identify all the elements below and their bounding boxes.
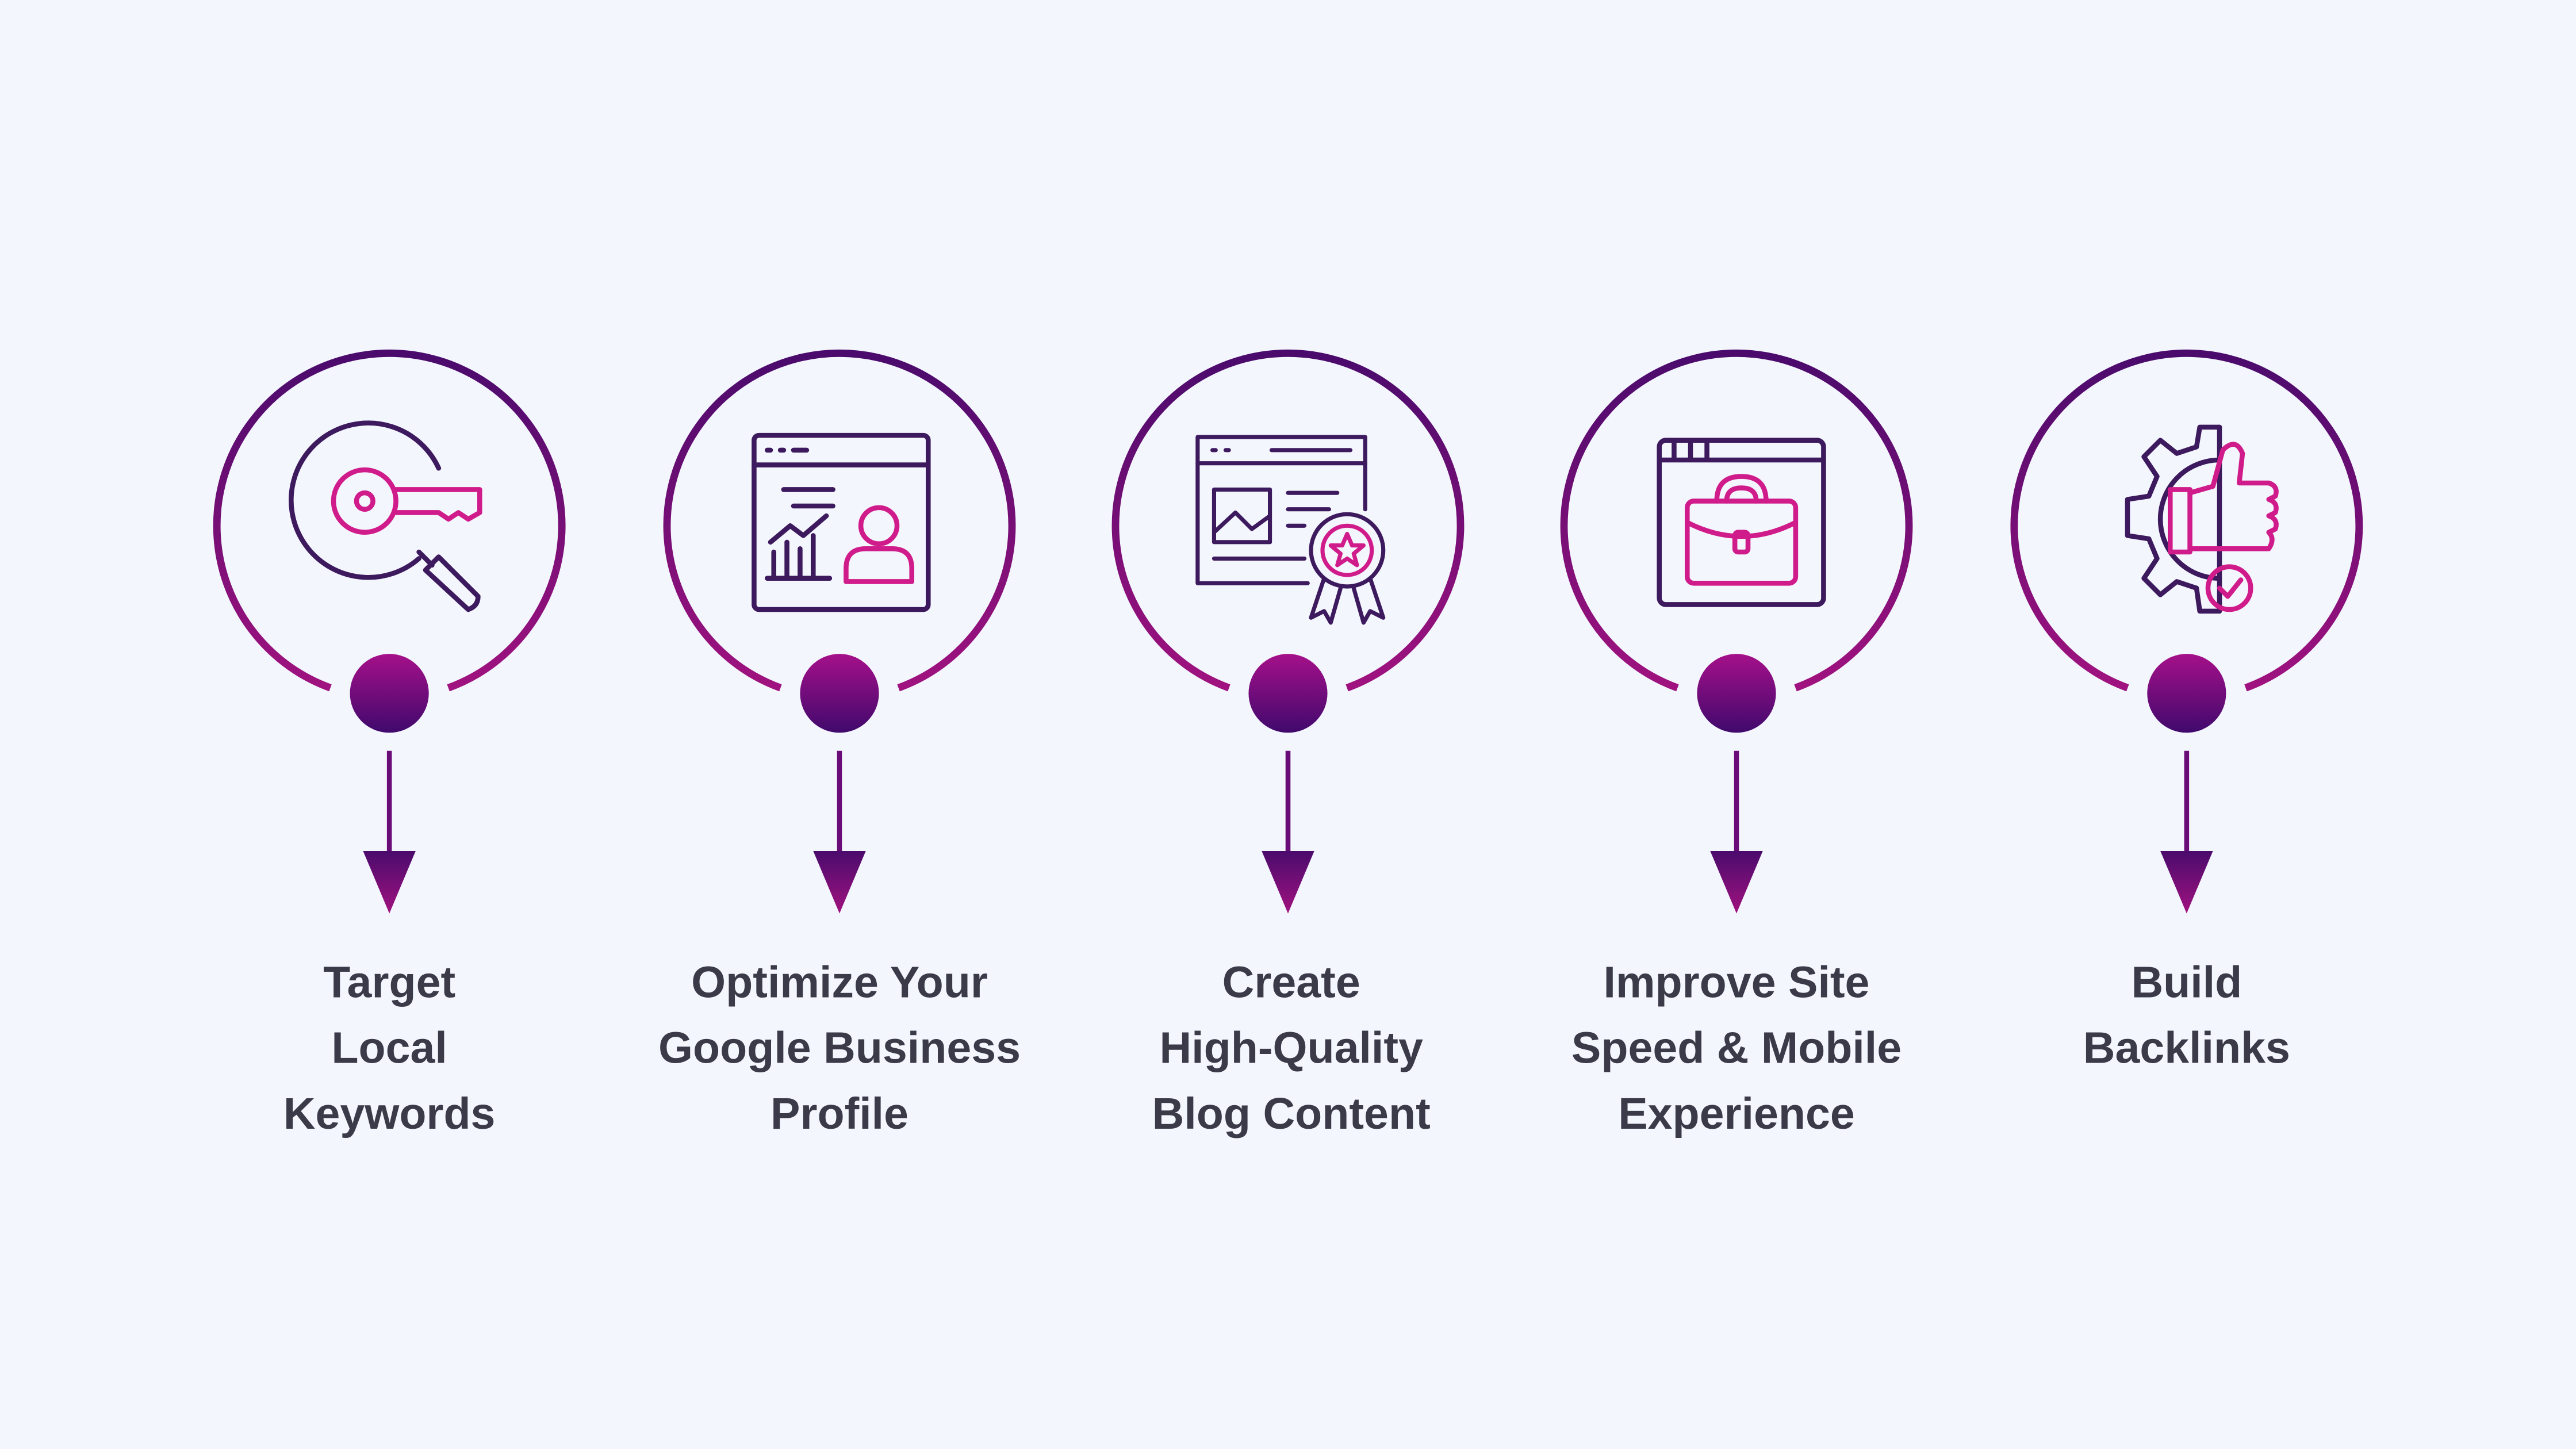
text: Speed & Mobile	[1571, 1023, 1902, 1073]
arrow	[363, 751, 416, 914]
step 5: Build Backlinks	[2014, 353, 2359, 914]
arrow	[1710, 751, 1763, 914]
text: Local	[331, 1023, 447, 1073]
step 4: Improve Site Speed & Mobile Experience	[1564, 353, 1909, 914]
dot	[1248, 654, 1328, 733]
arrow	[1262, 751, 1314, 914]
ring	[2014, 353, 2359, 688]
ring	[667, 353, 1012, 688]
text: Keywords	[283, 1089, 495, 1138]
text: Google Business	[658, 1023, 1021, 1073]
text: High-Quality	[1159, 1023, 1423, 1073]
text: Optimize Your	[691, 957, 988, 1007]
icon: dashboard profile	[754, 435, 928, 610]
ring	[217, 353, 562, 688]
ring	[1116, 353, 1460, 688]
icon: browser briefcase	[1659, 440, 1823, 604]
text: Profile	[770, 1089, 908, 1138]
step 3: Create High-Quality Blog Content	[1116, 353, 1460, 914]
text: Create	[1222, 957, 1360, 1007]
arrow	[2160, 751, 2213, 914]
arrow	[813, 751, 866, 914]
dot	[2147, 654, 2226, 733]
dot	[1697, 654, 1776, 733]
label: Target	[323, 957, 455, 1007]
text: Build	[2131, 957, 2242, 1007]
text: Backlinks	[2083, 1023, 2290, 1073]
step 1: Target Local Keywords	[217, 353, 562, 1007]
icon: gear thumbs up	[2128, 427, 2276, 611]
dot	[800, 654, 879, 733]
icon: blog badge	[1198, 437, 1383, 623]
text: Improve Site	[1604, 957, 1869, 1007]
icon: key magnifier	[291, 423, 480, 610]
text: Experience	[1618, 1089, 1855, 1138]
dot	[350, 654, 429, 733]
ring	[1564, 353, 1909, 688]
step 2: Optimize Your Google Business Profile	[667, 353, 1012, 914]
text: Blog Content	[1152, 1089, 1431, 1138]
